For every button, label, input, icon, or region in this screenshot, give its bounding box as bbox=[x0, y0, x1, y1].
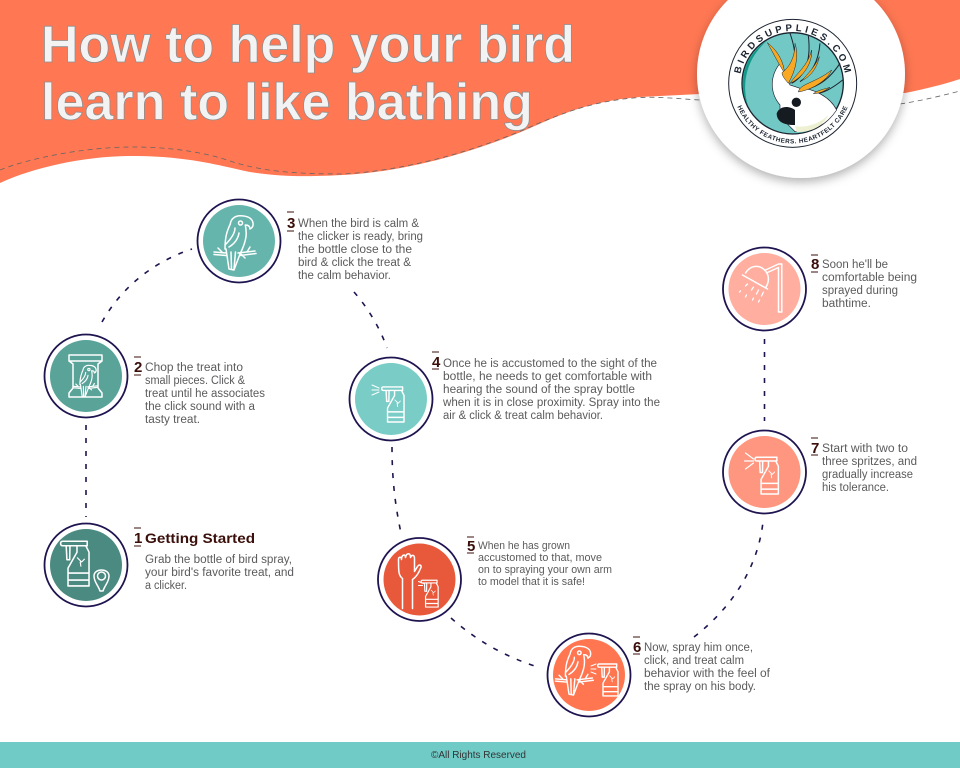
step 4 text: air & click & treat calm behavior. bbox=[443, 410, 603, 422]
footer bar bbox=[0, 742, 960, 768]
step 8 icon bbox=[723, 248, 806, 330]
step 4 text: when it is in close proximity. Spray into the bbox=[442, 397, 660, 409]
step 2 text: the click sound with a bbox=[145, 401, 256, 413]
step 5 text: on to spraying your own arm bbox=[478, 564, 612, 576]
step 3 text: 3 bbox=[287, 215, 295, 232]
connector: step 5 to 6 bbox=[451, 618, 541, 668]
step 7 icon bbox=[723, 430, 806, 514]
step 8 text: sprayed during bbox=[822, 285, 898, 297]
step 6 text: click, and treat calm bbox=[644, 655, 744, 667]
step 2 text: Chop the treat into bbox=[145, 362, 243, 374]
connector: step 2 to 3 bbox=[102, 249, 192, 322]
header dashed line bbox=[0, 91, 960, 174]
step 1 text: Getting Started bbox=[145, 530, 255, 546]
connector: step 6 to 7 bbox=[694, 522, 763, 637]
step 1 text bbox=[134, 528, 294, 592]
title bbox=[41, 16, 575, 132]
title: learn to like bathing bbox=[41, 74, 533, 132]
step 1 text: 1 bbox=[134, 530, 142, 547]
step 4 text: hearing the sound of the spray bottle bbox=[443, 384, 635, 396]
step 7 text: gradually increase bbox=[822, 469, 913, 481]
step 5 text: When he has grown bbox=[478, 540, 570, 552]
connector: step 7 to 8 bbox=[764, 339, 766, 421]
connector: step 3 to 4 bbox=[354, 292, 387, 348]
step 6 text: 6 bbox=[633, 639, 641, 656]
step 6 text: behavior with the feel of bbox=[644, 668, 771, 680]
step 6 text bbox=[633, 637, 771, 693]
step 1 icon bbox=[44, 524, 128, 606]
step 3 text bbox=[287, 212, 423, 282]
step 4 icon bbox=[350, 358, 432, 440]
logo badge bbox=[691, 0, 911, 188]
logo badge: HEALTHY FEATHERS. HEARTFELT CARE bbox=[738, 105, 848, 144]
step 3 text: the bottle close to the bbox=[298, 244, 412, 256]
step 4 text: bottle, he needs to get comfortable with bbox=[443, 371, 652, 383]
step 5 text: 5 bbox=[467, 538, 475, 555]
step 6 text: the spray on his body. bbox=[644, 681, 756, 693]
step 8 text: 8 bbox=[811, 256, 819, 273]
step 5 icon bbox=[378, 538, 461, 621]
step 2 text bbox=[134, 357, 265, 426]
logo badge: BIRDSUPPLIES.COM bbox=[734, 24, 852, 74]
step 8 text: comfortable being bbox=[822, 272, 917, 284]
header wave bbox=[0, 0, 960, 183]
step 3 icon bbox=[198, 200, 280, 282]
step 5 text: to model that it is safe! bbox=[478, 576, 585, 588]
step 3 text: When the bird is calm & bbox=[298, 218, 419, 230]
step 8 text bbox=[811, 255, 917, 310]
step 6 icon bbox=[548, 634, 630, 716]
step 7 text: Start with two to bbox=[822, 443, 908, 455]
step 8 text: bathtime. bbox=[822, 298, 871, 310]
step 5 text: accustomed to that, move bbox=[478, 552, 602, 564]
step 8 text: Soon he'll be bbox=[822, 259, 888, 271]
step 4 text: 4 bbox=[432, 354, 441, 371]
step 4 text bbox=[432, 352, 660, 422]
connector: step 4 to 5 bbox=[392, 447, 401, 533]
step 7 text: 7 bbox=[811, 440, 819, 457]
step 2 text: small pieces. Click & bbox=[145, 375, 245, 387]
step 7 text: three spritzes, and bbox=[822, 456, 917, 468]
footer text: ©All Rights Reserved bbox=[431, 749, 526, 761]
step 5 text bbox=[467, 537, 612, 588]
step 2 text: tasty treat. bbox=[145, 414, 200, 426]
step 2 text: treat until he associates bbox=[145, 388, 265, 400]
step 4 text: Once he is accustomed to the sight of the bbox=[443, 358, 657, 370]
step 3 text: the calm behavior. bbox=[298, 270, 391, 282]
step 2 text: 2 bbox=[134, 359, 142, 376]
step 7 text bbox=[811, 438, 917, 494]
title: How to help your bird bbox=[41, 16, 575, 74]
connector: step 1 to 2 bbox=[85, 425, 87, 517]
step 1 text: your bird's favorite treat, and bbox=[145, 567, 294, 579]
step 3 text: the clicker is ready, bring bbox=[298, 231, 423, 243]
step 2 icon bbox=[44, 334, 128, 418]
step 1 text: Grab the bottle of bird spray, bbox=[145, 554, 292, 566]
step 1 text: a clicker. bbox=[145, 580, 187, 592]
step 3 text: bird & click the treat & bbox=[298, 257, 411, 269]
step 7 text: his tolerance. bbox=[822, 482, 889, 494]
step 6 text: Now, spray him once, bbox=[644, 642, 753, 654]
